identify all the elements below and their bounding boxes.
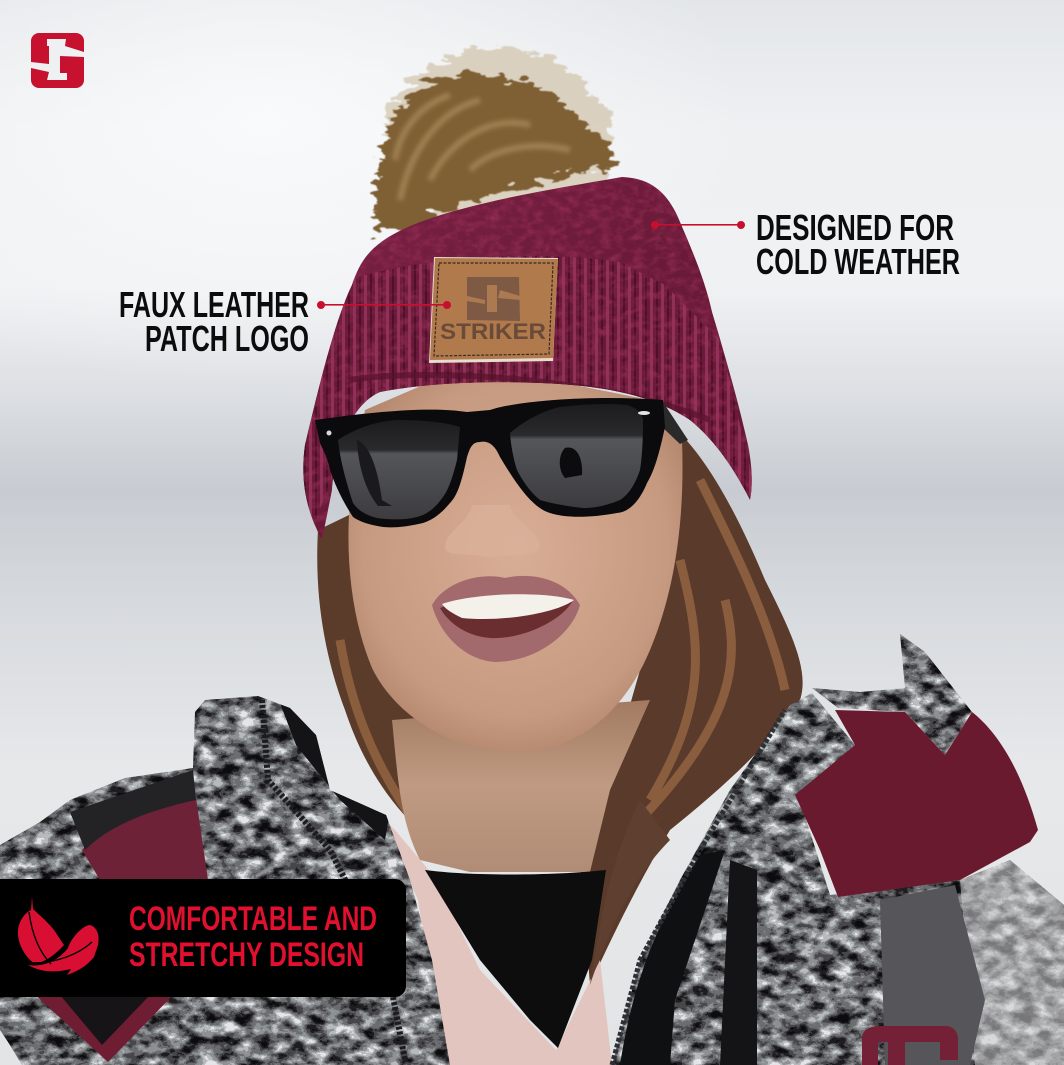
hood: maroon lining <box>795 710 1038 897</box>
light shoulder <box>960 860 1064 1065</box>
pointer line: patch <box>317 301 451 309</box>
jacket: right side <box>610 690 1064 1065</box>
pompom <box>376 48 616 233</box>
nose <box>445 505 540 558</box>
sunglasses <box>315 398 688 527</box>
maroon hood lining <box>82 798 208 880</box>
hair strand over shirt <box>590 800 670 985</box>
neck <box>392 700 650 872</box>
fleece collar <box>280 704 388 840</box>
leather patch logo: STRIKER <box>440 319 546 344</box>
callout: faux leather patch logo <box>119 284 451 359</box>
brand logo: S mark <box>31 33 84 88</box>
grey panel <box>880 885 985 1065</box>
sweater <box>380 815 612 1065</box>
panel text: COMFORTABLE AND <box>129 900 377 938</box>
maroon flap <box>38 997 171 1062</box>
icon: feather <box>18 897 99 975</box>
left lens <box>338 420 460 519</box>
hood: camo edge <box>812 634 972 755</box>
hair behind face <box>317 420 803 985</box>
panel: comfortable and stretchy design <box>0 879 406 997</box>
callout: faux leather patch logo: FAUX LEATHER <box>119 284 309 325</box>
right lens <box>510 404 643 508</box>
callout: designed for cold weather <box>651 207 960 282</box>
jacket chest logo <box>862 1026 958 1065</box>
reflections <box>357 440 392 506</box>
mouth: teeth <box>442 594 574 619</box>
inner collar shadow <box>70 770 196 850</box>
jacket: left side <box>0 676 460 1065</box>
leather patch logo <box>429 257 558 363</box>
callout: designed for cold weather: COLD WEATHER <box>756 241 960 282</box>
callout: designed for cold weather: DESIGNED FOR <box>756 207 954 248</box>
beanie <box>300 170 760 560</box>
face <box>348 382 683 752</box>
black zip panel <box>620 850 725 1065</box>
black t-shirt <box>425 870 606 1048</box>
panel text: STRETCHY DESIGN <box>129 936 364 974</box>
panel text <box>129 900 377 974</box>
callout: faux leather patch logo: PATCH LOGO <box>145 318 309 359</box>
mouth: lips <box>432 576 580 662</box>
mouth: interior <box>440 595 572 638</box>
pointer line: beanie <box>651 221 745 229</box>
